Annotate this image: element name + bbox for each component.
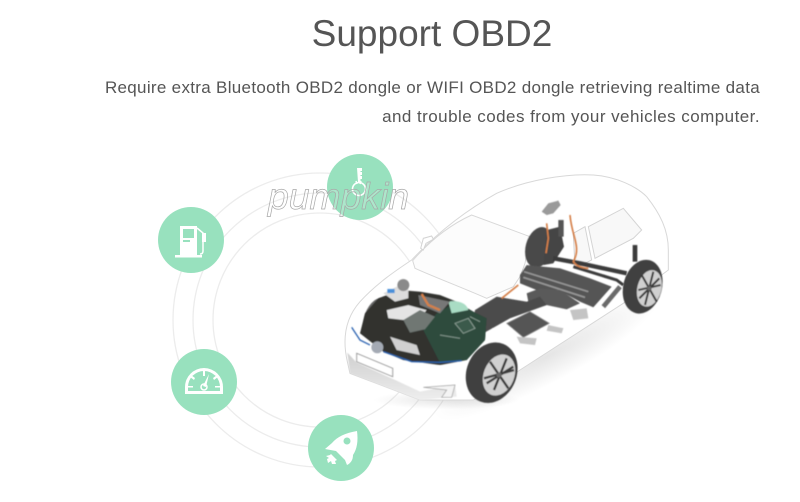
rear suspension arms (553, 245, 635, 307)
rear strut tower (542, 201, 561, 215)
front wheel (457, 335, 526, 411)
icon: light bulb (327, 154, 393, 220)
front inner wheel (358, 293, 399, 343)
side windows (573, 208, 642, 268)
rear wheel (617, 255, 668, 318)
title: Support OBD2 (312, 13, 552, 54)
battery box (507, 312, 549, 337)
orange high voltage cables (502, 215, 588, 298)
windshield (413, 215, 530, 298)
blue trim strip (352, 327, 462, 362)
rear floor pan (520, 265, 612, 307)
engine bay (360, 279, 487, 365)
icon: fuel pump (158, 207, 224, 273)
centre tunnel (527, 288, 580, 310)
floor brackets (517, 308, 588, 345)
car ground shadow (422, 274, 671, 440)
icon: speedometer gauge (171, 349, 237, 415)
description text: and trouble codes from your vehicles computer. (382, 107, 760, 126)
front bumper and grille (347, 353, 457, 400)
wing mirror (421, 236, 433, 250)
description text (105, 78, 760, 126)
rear spare wheel (521, 224, 564, 271)
watermark: Pumpkin logo: pumpkin (267, 176, 409, 217)
car illustration (345, 175, 671, 440)
icon: rocket (308, 415, 374, 481)
description text: Require extra Bluetooth OBD2 dongle or WIFI OBD2 dongle retrieving realtime data (105, 78, 760, 97)
front battery (473, 297, 547, 333)
car body outline (345, 175, 668, 400)
